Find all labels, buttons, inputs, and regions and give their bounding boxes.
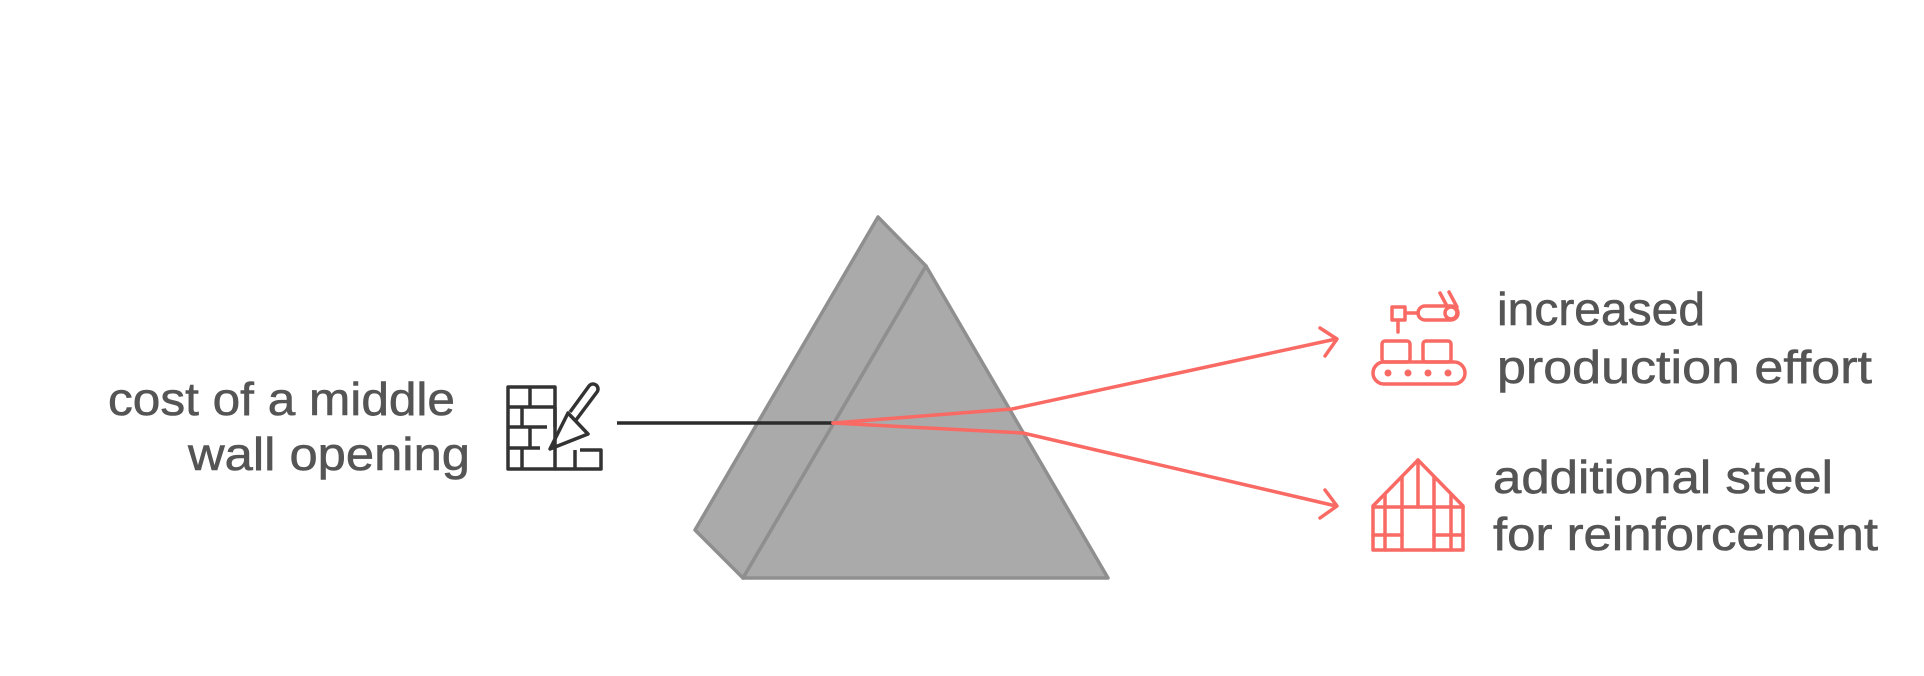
arrow: production effort — [833, 328, 1337, 423]
left label: cost of a middle — [108, 373, 455, 425]
icon: brick wall with trowel — [508, 384, 601, 469]
prism — [695, 217, 1108, 578]
arrow: additional steel — [833, 423, 1337, 518]
left label — [108, 373, 470, 480]
icon: conveyor / production — [1373, 292, 1465, 384]
label: additional steel for reinforcement — [1493, 451, 1878, 560]
icon: greenhouse / steel frame — [1373, 460, 1463, 550]
input line — [617, 421, 833, 425]
label: additional steel for reinforcement: for reinforcement — [1493, 508, 1878, 560]
label: increased production effort: production effort — [1497, 341, 1872, 393]
label: additional steel for reinforcement: additional steel — [1493, 451, 1833, 503]
label: increased production effort — [1497, 283, 1872, 393]
left label: wall opening — [187, 428, 470, 480]
label: increased production effort: increased — [1497, 283, 1705, 335]
